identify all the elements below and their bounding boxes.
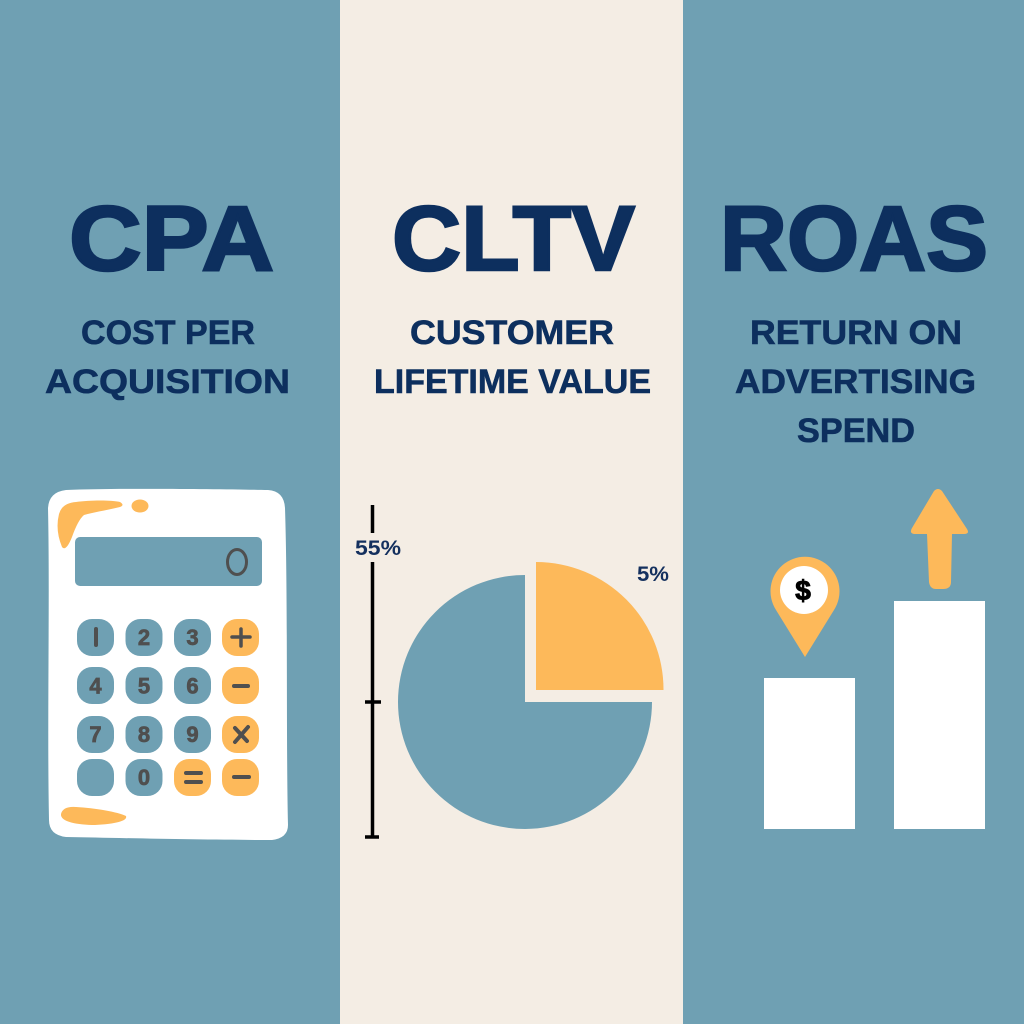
keys row 1: [77, 619, 259, 656]
subheading: return on advertising spend: [735, 314, 976, 450]
bar: right: [894, 601, 985, 829]
icon: up arrow: [911, 489, 968, 589]
icon: calculator: [48, 489, 288, 840]
keys row 3: 9: [186, 722, 199, 747]
keys row 3: 7: [89, 722, 102, 747]
heading: CPA: CPA: [69, 188, 274, 290]
keys row 1: 3: [186, 625, 199, 650]
calculator highlight bottom: [61, 807, 126, 825]
heading: CLTV: CLTV: [392, 188, 635, 290]
calculator body: [48, 489, 288, 840]
pie: large slice: [398, 575, 652, 829]
keys row 2: 6: [186, 674, 199, 698]
panel: background right: [683, 0, 1024, 1024]
subheading: cost per acquisition: [45, 314, 290, 401]
keys row 2: [77, 667, 259, 704]
keys row 3: [77, 716, 259, 753]
keys row 2: 4: [89, 674, 102, 698]
icon: location pin with dollar: $: [795, 575, 811, 606]
chart: axis with 55% label: 55%: [355, 537, 401, 560]
bar: left: [764, 678, 855, 829]
pie: small slice: [536, 562, 664, 690]
calculator display: [75, 537, 262, 586]
chart: bars with pin and arrow: [764, 489, 985, 829]
subheading: return on advertising spend: SPEND: [797, 412, 915, 450]
subheading: customer lifetime value: LIFETIME VALUE: [374, 363, 651, 401]
heading: ROAS: ROAS: [720, 188, 988, 290]
keys row 1: 2: [138, 625, 150, 650]
calculator highlight top: [58, 500, 122, 548]
chart: pie: [398, 562, 669, 829]
calculator highlight dot: [132, 500, 148, 512]
keys row 2: 5: [138, 674, 150, 698]
keys row 4: 0: [138, 765, 150, 790]
subheading: return on advertising spend: ADVERTISING: [735, 363, 976, 401]
subheading: customer lifetime value: [374, 314, 651, 401]
panel: background left: [0, 0, 340, 1024]
display zero: [228, 550, 246, 574]
subheading: return on advertising spend: RETURN ON: [750, 314, 962, 352]
keys row 3: 8: [138, 722, 150, 747]
subheading: cost per acquisition: ACQUISITION: [45, 363, 290, 401]
keys row 4: [77, 759, 259, 796]
subheading: customer lifetime value: CUSTOMER: [410, 314, 614, 352]
icon: location pin with dollar: [771, 557, 840, 657]
subheading: cost per acquisition: COST PER: [81, 314, 255, 352]
chart: axis with 55% label: [355, 505, 401, 838]
panel: background center: [340, 0, 683, 1024]
pie label: 5%: 5%: [637, 563, 669, 586]
